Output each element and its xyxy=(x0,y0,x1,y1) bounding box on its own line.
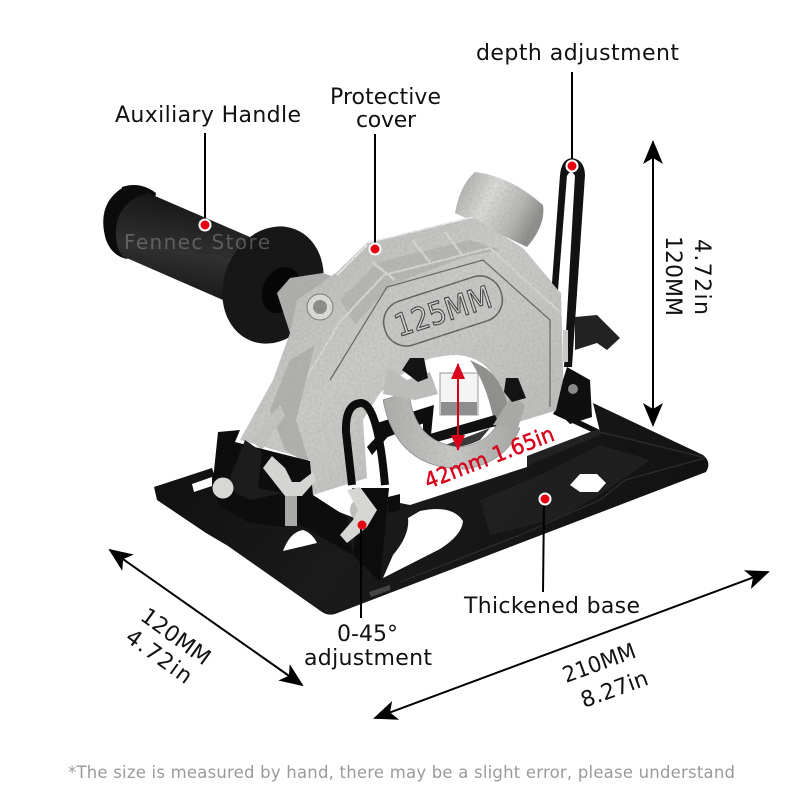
side handle xyxy=(103,185,341,359)
protective cover xyxy=(240,217,564,495)
clamp ring xyxy=(383,358,526,469)
callout: depth adjustment: depth adjustment xyxy=(476,41,679,66)
dimension: length xyxy=(375,572,768,718)
dimension: width xyxy=(110,550,302,690)
callout: thickened base: Thickened base xyxy=(463,594,640,619)
neck bolt xyxy=(307,294,333,320)
dimension: width: 120MM xyxy=(135,604,215,671)
callout: depth adjustment xyxy=(476,41,679,172)
callout: 0-45 adjustment xyxy=(304,520,432,671)
left wing nut xyxy=(263,456,316,526)
callout: 0-45 adjustment: adjustment xyxy=(304,646,432,671)
blade opening xyxy=(423,360,512,450)
callout: 0-45 adjustment: 0-45° xyxy=(337,622,398,647)
dimension: width: 4.72in xyxy=(120,625,197,690)
pivot bracket xyxy=(556,367,592,424)
tool base plate xyxy=(154,403,708,615)
dust port xyxy=(455,172,543,247)
callout: auxiliary handle xyxy=(115,103,301,230)
base cutouts xyxy=(383,509,463,578)
back rails xyxy=(367,392,602,513)
locking lever handle xyxy=(575,315,620,350)
watermark: Fennec Store xyxy=(124,230,270,254)
125MM badge: 125MM xyxy=(390,279,496,345)
right wing nut xyxy=(340,487,377,543)
dimension: height: 4.72in xyxy=(689,239,714,315)
callout: protective cover: Protective xyxy=(330,85,441,110)
angle scale plate xyxy=(346,403,389,582)
handle end cap xyxy=(103,185,156,259)
dimension: length: 210MM xyxy=(560,639,639,689)
left bracket block xyxy=(212,430,353,555)
clamp bolts xyxy=(402,358,428,382)
dimension: height: 120MM xyxy=(660,236,685,316)
callout: protective cover xyxy=(330,85,441,254)
footnote: *The size is measured by hand, there may be a slight error, please understand xyxy=(68,763,735,782)
dimension: length: 8.27in xyxy=(578,666,652,714)
red dimension label: 42mm 1.65in xyxy=(421,422,558,495)
callout: thickened base xyxy=(463,494,640,619)
cover top ribs xyxy=(340,240,500,325)
callout: protective cover: cover xyxy=(356,108,417,133)
red arrow: arbor 42mm xyxy=(457,364,459,450)
depth slot lever xyxy=(552,158,620,424)
callout: auxiliary handle: Auxiliary Handle xyxy=(115,103,301,128)
handle guard disc xyxy=(205,211,341,359)
dimension: height xyxy=(653,142,714,425)
